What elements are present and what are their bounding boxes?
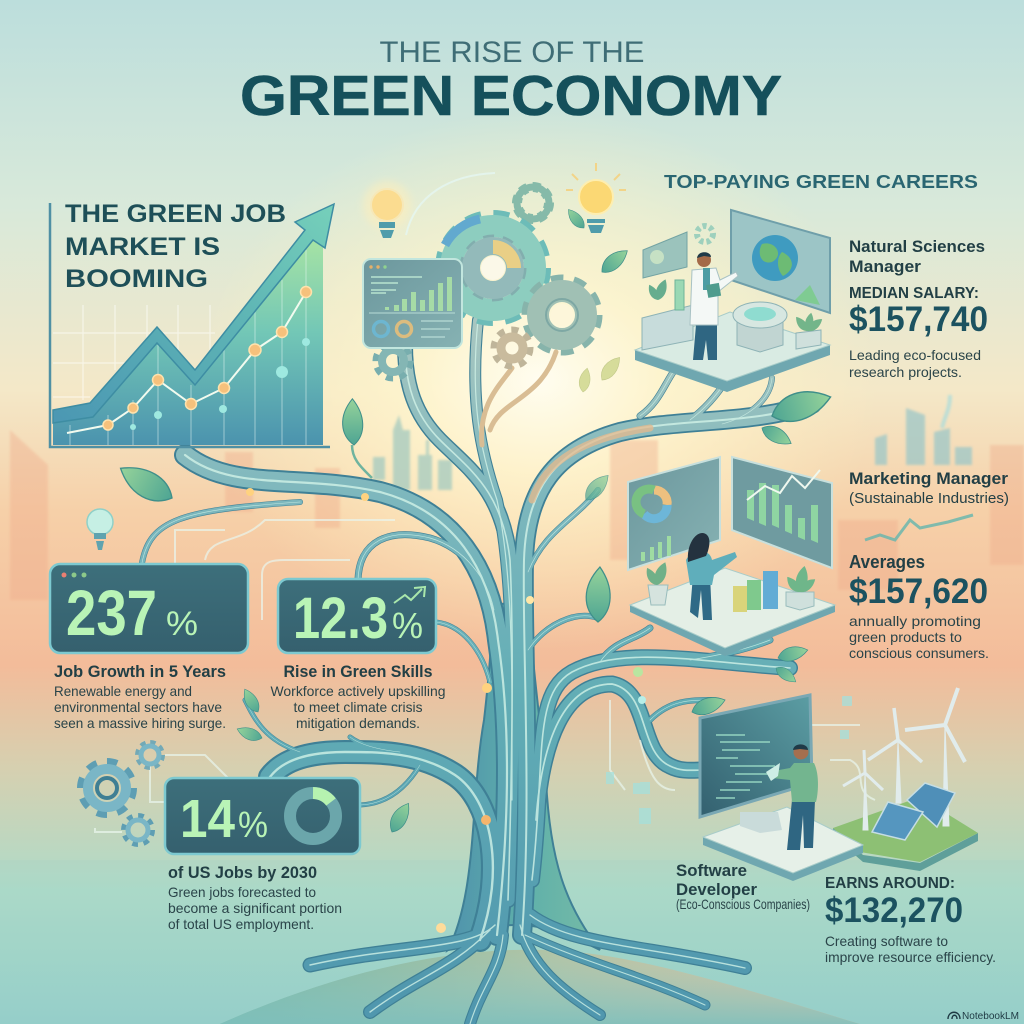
gear decal — [697, 226, 713, 242]
tan branches to small gears — [482, 352, 556, 445]
stat card: 12.3% — [278, 579, 436, 653]
stat text: us jobs: become a significant portion — [168, 900, 342, 916]
text: software developer: Software — [676, 861, 747, 880]
title: THE RISE OF THE — [380, 36, 644, 69]
city skyline center — [373, 415, 452, 490]
stat card: 14%: 14 — [180, 789, 235, 849]
gear: small teal — [376, 344, 410, 378]
heading: MARKET IS — [65, 233, 220, 261]
stat text: green skills — [270, 663, 446, 731]
arc decoration — [406, 173, 495, 235]
small trend line — [865, 515, 973, 540]
heading — [65, 200, 286, 293]
illustration: marketing platform — [628, 457, 835, 656]
warm sunlit branch highlight — [532, 428, 650, 500]
gear: small tan — [494, 330, 530, 366]
text: software developer: Creating software to — [825, 933, 948, 949]
stat text: green skills: Workforce actively upskilling — [270, 683, 446, 699]
title: GREEN ECONOMY — [240, 64, 782, 128]
icons: left gears — [82, 743, 162, 844]
text: natural sciences manager — [849, 237, 988, 380]
illustration: scientist lab platform — [635, 210, 830, 392]
ground hill — [220, 950, 860, 1024]
stat text: job growth: environmental sectors have — [54, 699, 222, 715]
screen left — [628, 457, 720, 570]
text: marketing manager: (Sustainable Industries) — [849, 491, 1009, 507]
stat text: job growth — [54, 663, 226, 731]
floating icons — [606, 696, 852, 824]
trunk body — [448, 600, 600, 950]
stat text: us jobs: of US Jobs by 2030 — [168, 864, 317, 882]
tree — [142, 320, 812, 1024]
heading: THE GREEN JOB — [65, 200, 286, 228]
pie chart — [636, 489, 667, 519]
chart arrow band — [53, 204, 334, 423]
potted plants and 3d bars — [643, 560, 818, 612]
text: natural sciences manager: Natural Sciences — [849, 237, 985, 256]
stat card: 237% — [50, 564, 248, 653]
text: natural sciences manager: $157,740 — [849, 300, 988, 339]
glowing tree nodes — [246, 488, 646, 933]
stat card: 12.3%: % — [392, 605, 423, 646]
green platform — [833, 828, 978, 871]
leaf stem by skyline — [352, 445, 372, 478]
title — [240, 36, 782, 128]
circuit lines — [95, 520, 875, 832]
wind turbines — [843, 688, 965, 830]
text: software developer: $132,270 — [825, 891, 963, 930]
text: marketing manager: green products to — [849, 629, 962, 645]
small screen — [643, 232, 687, 278]
heading: top paying careers: TOP-PAYING GREEN CAREERS — [664, 172, 978, 192]
text: software developer: (Eco-Conscious Companies) — [676, 896, 810, 912]
chart axes — [50, 203, 330, 447]
illustration: software developer platform — [606, 688, 978, 881]
panel: chart, the green job market is booming — [50, 200, 334, 447]
watermark: NotebookLM — [962, 1010, 1019, 1022]
lab counter — [642, 305, 693, 350]
stat text: us jobs: Green jobs forecasted to — [168, 884, 316, 900]
gear: large — [442, 217, 544, 319]
text: natural sciences manager: Leading eco-focused — [849, 347, 981, 363]
stat text: green skills: mitigation demands. — [296, 715, 420, 731]
developer — [766, 744, 818, 850]
text: marketing manager — [849, 469, 1009, 661]
stat text: us jobs — [168, 864, 342, 932]
stat card: 14% — [165, 778, 360, 854]
stat text: green skills: Rise in Green Skills — [284, 663, 432, 681]
beaker and plant — [675, 280, 684, 310]
icon: light bulb left — [87, 509, 113, 550]
stat text: green skills: to meet climate crisis — [294, 699, 422, 715]
stat card: 237%: % — [166, 605, 198, 643]
text: software developer: EARNS AROUND: — [825, 875, 955, 892]
icon: bulb center-left — [363, 181, 411, 238]
text: software developer — [676, 861, 996, 965]
text: natural sciences manager: research projects. — [849, 364, 962, 380]
faint city skyline — [10, 430, 1024, 600]
text: marketing manager: $157,620 — [849, 572, 988, 611]
gear: right — [527, 280, 597, 350]
stat card: 237%: 237 — [66, 577, 157, 649]
text: marketing manager: conscious consumers. — [849, 645, 989, 661]
heading: BOOMING — [65, 265, 208, 293]
text: software developer: improve resource efficiency. — [825, 949, 996, 965]
plant box — [796, 330, 821, 349]
large screen with globe — [731, 210, 830, 313]
dashboard panel — [363, 259, 462, 348]
solar panels — [872, 783, 955, 840]
white platform — [703, 837, 863, 881]
text: marketing manager: Marketing Manager — [849, 469, 1008, 488]
pedestal — [737, 315, 783, 352]
scientist — [690, 252, 738, 360]
text: natural sciences manager: MEDIAN SALARY: — [849, 285, 979, 302]
chart grid — [53, 305, 215, 400]
icon: bulb right — [566, 163, 626, 233]
stat text: us jobs: of total US employment. — [168, 916, 314, 932]
text: software developer: Developer — [676, 880, 757, 899]
text: marketing manager: annually promoting — [849, 613, 981, 629]
donut chart — [290, 793, 336, 839]
stat card: 14%: % — [238, 804, 268, 845]
gears cluster — [376, 187, 597, 378]
stat text: job growth: Renewable energy and — [54, 683, 192, 699]
stat text: job growth: Job Growth in 5 Years — [54, 663, 226, 681]
illustration: city skyline right — [875, 395, 972, 465]
stat card: 12.3%: 12.3 — [293, 586, 388, 651]
woman — [686, 533, 737, 620]
platform — [630, 605, 835, 656]
stat text: job growth: seen a massive hiring surge. — [54, 715, 226, 731]
monitor — [740, 812, 782, 833]
platform — [635, 345, 830, 392]
text: marketing manager: Averages — [849, 552, 925, 572]
leaves — [114, 206, 834, 835]
text: natural sciences manager: Manager — [849, 257, 921, 276]
chart line with markers — [67, 286, 312, 433]
screen right — [732, 457, 832, 568]
chart area — [53, 240, 323, 445]
